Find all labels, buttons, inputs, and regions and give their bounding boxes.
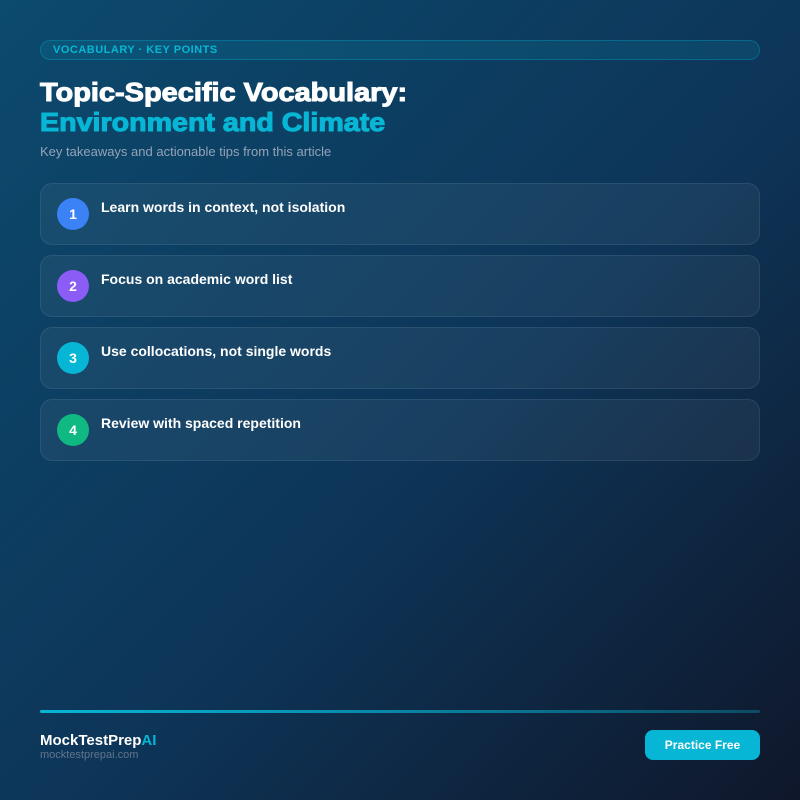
icon: number 1: 1 (69, 206, 77, 222)
icon: number 2 (57, 270, 89, 302)
icon: number 4: 4 (69, 422, 77, 438)
title line 2: Environment and Climate (40, 107, 385, 137)
panel: key point 4 (40, 399, 760, 461)
badge: category label: VOCABULARY · KEY POINTS (53, 44, 218, 56)
text: key point 3: Use collocations, not single words (101, 343, 331, 359)
panel: key point 2 (40, 255, 760, 317)
brand url: mocktestprepai.com (40, 749, 138, 761)
brand name: MockTestPrepAI (40, 732, 156, 749)
button: practice free (645, 730, 760, 760)
footer brand (40, 732, 156, 761)
panel: key point 1 (40, 183, 760, 245)
text: key point 1: Learn words in context, not isolation (101, 199, 345, 215)
subtitle: Key takeaways and actionable tips from this article (40, 144, 331, 159)
icon: number 3 (57, 342, 89, 374)
footer accent line (40, 710, 760, 713)
icon: number 3: 3 (69, 350, 77, 366)
badge: category label (40, 40, 760, 60)
button: practice free: Practice Free (665, 738, 740, 752)
text: key point 4: Review with spaced repetition (101, 415, 301, 431)
panel: key point 3 (40, 327, 760, 389)
title (40, 77, 407, 137)
title line 1: Topic-Specific Vocabulary: (40, 77, 407, 107)
icon: number 4 (57, 414, 89, 446)
icon: number 1 (57, 198, 89, 230)
text: key point 2: Focus on academic word list (101, 271, 292, 287)
icon: number 2: 2 (69, 278, 77, 294)
